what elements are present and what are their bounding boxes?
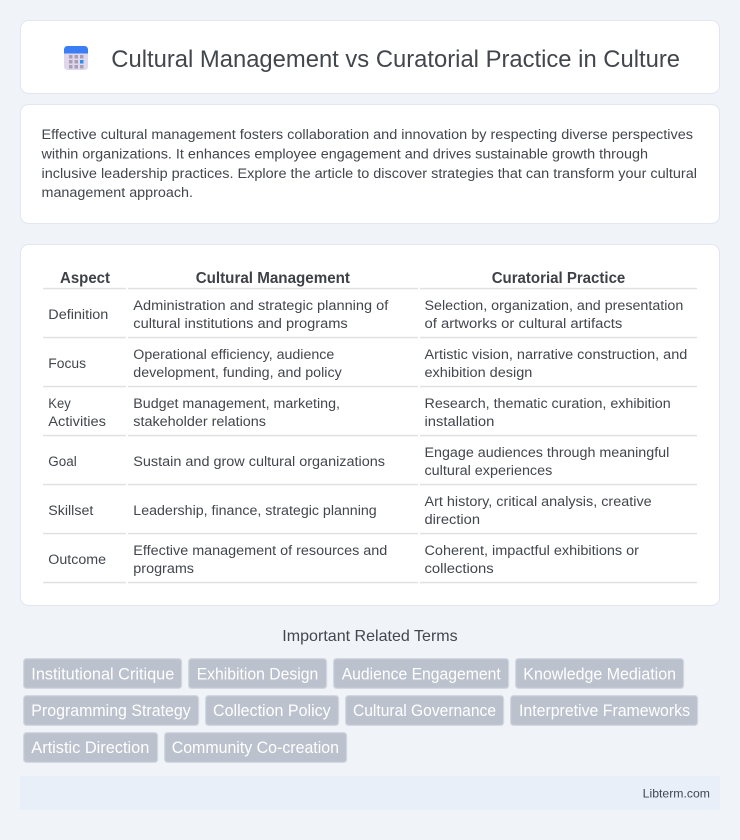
- row: skillset: [48, 494, 652, 528]
- row: skillset: direction: [424, 512, 480, 528]
- row: key activities: Activities: [48, 414, 106, 430]
- row: skillset: Leadership, finance, strategic planning: [133, 503, 377, 519]
- title: Cultural Management vs Curatorial Practice in Culture: [111, 46, 680, 73]
- row: focus: development, funding, and policy: [133, 365, 343, 381]
- heading: important related terms: Important Related Terms: [282, 628, 458, 645]
- row: key activities: [48, 396, 671, 430]
- tag: artistic direction: [24, 733, 158, 762]
- row: key activities: stakeholder relations: [133, 414, 266, 430]
- tag: interpretive frameworks: Interpretive Frameworks: [519, 702, 690, 720]
- row: goal: Engage audiences through meaningful: [424, 445, 669, 461]
- tag: knowledge mediation: Knowledge Mediation: [523, 665, 676, 683]
- row: definition: [48, 298, 683, 332]
- text block: introduction paragraph: Effective cultural management fosters collaboration and innovation by respecting diverse perspectives: [42, 127, 693, 143]
- tag: knowledge mediation: [516, 659, 684, 688]
- row: outcome: Effective management of resources and: [133, 543, 387, 559]
- row: outcome: Coherent, impactful exhibitions or: [424, 543, 639, 559]
- footer credit: Libterm.com: [643, 786, 710, 800]
- table header: [60, 270, 626, 287]
- row: definition: Definition: [48, 307, 108, 323]
- tag: artistic direction: Artistic Direction: [31, 739, 149, 757]
- tag: audience engagement: [334, 659, 509, 688]
- tag: collection policy: [206, 696, 339, 725]
- panel: comparison table: [20, 244, 720, 606]
- row: key activities: installation: [424, 414, 494, 430]
- row: skillset: Skillset: [48, 503, 93, 519]
- tag: programming strategy: Programming Strategy: [31, 702, 192, 720]
- row: key activities: Budget management, marketing,: [133, 396, 340, 412]
- row: definition: cultural institutions and programs: [133, 316, 348, 332]
- row: goal: [48, 445, 669, 479]
- tag: exhibition design: Exhibition Design: [197, 665, 318, 683]
- row: outcome: [48, 543, 639, 577]
- panel: title header: [20, 20, 720, 94]
- row: focus: Focus: [48, 356, 86, 372]
- table header: Curatorial Practice: [492, 270, 626, 287]
- row: focus: Artistic vision, narrative construction, and: [424, 347, 687, 363]
- table header: Cultural Management: [196, 270, 350, 287]
- row: goal: Goal: [48, 454, 77, 470]
- table header: Aspect: [60, 270, 110, 287]
- icon: calendar: [64, 46, 88, 70]
- row: focus: exhibition design: [424, 365, 532, 381]
- tag list: related terms: [24, 659, 698, 762]
- tag: cultural governance: Cultural Governance: [353, 702, 496, 720]
- row: key activities: Research, thematic curation, exhibition: [424, 396, 671, 412]
- row: outcome: collections: [424, 561, 494, 577]
- tag: collection policy: Collection Policy: [213, 702, 332, 720]
- row: definition: Selection, organization, and presentation: [424, 298, 683, 314]
- row: skillset: Art history, critical analysis, creative: [424, 494, 652, 510]
- tag: audience engagement: Audience Engagement: [342, 665, 501, 683]
- row: focus: Operational efficiency, audience: [133, 347, 334, 363]
- row: definition: of artworks or cultural artifacts: [424, 316, 622, 332]
- text block: introduction paragraph: [40, 127, 697, 201]
- panel: introduction: [20, 104, 720, 224]
- text block: introduction paragraph: management approach.: [42, 185, 193, 201]
- text block: introduction paragraph: inclusive leadership practices. Explore the article to discover strategies that can transform your cultural: [42, 166, 697, 182]
- tag: community co-creation: Community Co-creation: [172, 739, 339, 757]
- row: key activities: Key: [48, 396, 72, 412]
- tag: community co-creation: [165, 733, 347, 762]
- footer bar: [20, 776, 720, 810]
- tag: cultural governance: [346, 696, 504, 725]
- row: goal: cultural experiences: [424, 463, 552, 479]
- row: outcome: Outcome: [48, 552, 106, 568]
- text block: introduction paragraph: within organizations. It enhances employee engagement and drives sustainable growth through: [40, 146, 648, 162]
- tag: institutional critique: Institutional Critique: [31, 665, 174, 683]
- row: outcome: programs: [133, 561, 194, 577]
- row: focus: [48, 347, 687, 381]
- tag: programming strategy: [24, 696, 199, 725]
- tag: institutional critique: [24, 659, 182, 688]
- tag: exhibition design: [189, 659, 327, 688]
- tag: interpretive frameworks: [511, 696, 698, 725]
- row: definition: Administration and strategic planning of: [133, 298, 388, 314]
- row: goal: Sustain and grow cultural organizations: [133, 454, 385, 470]
